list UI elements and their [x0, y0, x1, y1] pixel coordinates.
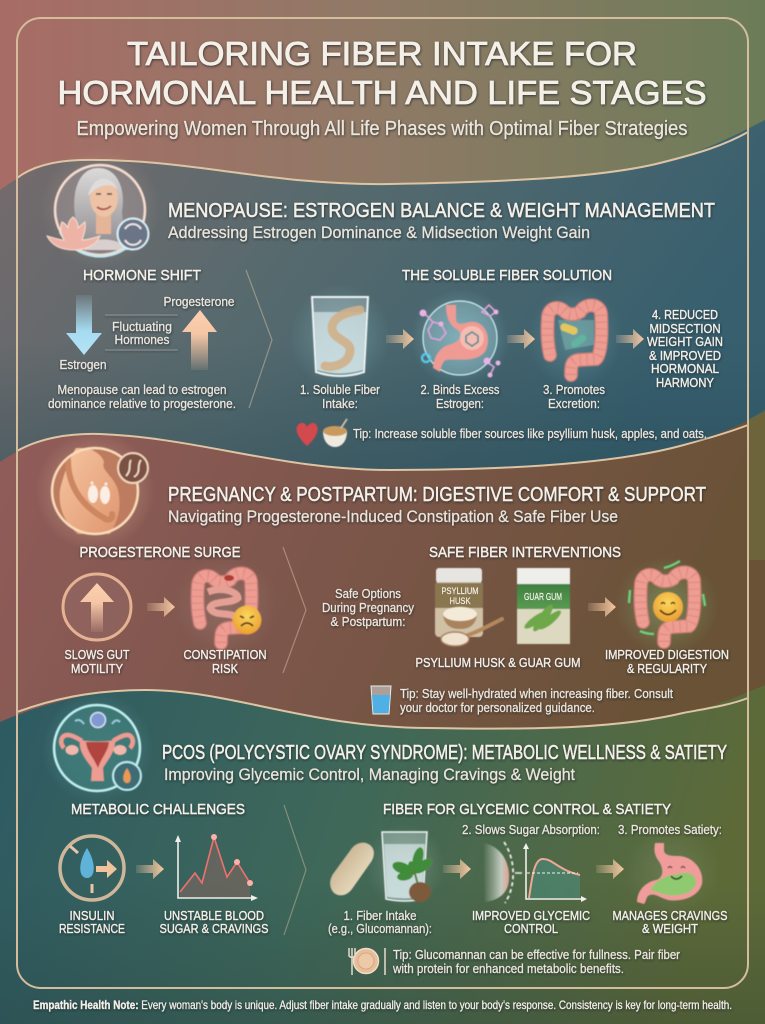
background: section shade — [0, 340, 765, 480]
icon: happy stomach — [624, 826, 720, 918]
label: insulin resistance: INSULIN — [70, 908, 114, 923]
subtitle: Empowering Women Through All Life Phases with Optimal Fiber Strategies — [76, 118, 688, 140]
section accent: right side olive — [748, 410, 765, 560]
tip text: Tip: Stay well-hydrated when increasing fiber. Consult — [400, 686, 673, 701]
arrow: progesterone up — [182, 310, 217, 370]
text: hormone explanation — [48, 382, 236, 411]
icon: constipated intestine — [174, 556, 278, 656]
label: step 3: 3. Promotes — [543, 382, 605, 397]
icon: uterus in circle — [41, 692, 153, 804]
column heading: fiber for glycemic control: FIBER FOR GLYCEMIC CONTROL & SATIETY — [383, 801, 671, 818]
label: unstable blood sugar — [160, 908, 269, 936]
tip text: Tip: Glucomannan can be effective for fullness. Pair fiber — [393, 947, 681, 962]
arrow — [136, 859, 164, 879]
label: unstable blood sugar: SUGAR & CRAVINGS — [160, 921, 269, 936]
icon: psyllium husk jar — [435, 568, 502, 646]
text: step 4: HARMONY — [656, 375, 714, 390]
label: estrogen: Estrogen — [60, 357, 106, 372]
label: step 1 — [300, 382, 381, 411]
label: constipation risk: CONSTIPATION — [184, 647, 266, 662]
chart: unstable blood sugar — [175, 834, 258, 901]
heading: MENOPAUSE: ESTROGEN BALANCE & WEIGHT MANAGEMENT — [168, 200, 715, 222]
label: improved glycemic control: IMPROVED GLYCEMIC — [472, 908, 590, 923]
subheading: Addressing Estrogen Dominance & Midsection Weight Gain — [168, 223, 590, 242]
label: improved glycemic control — [472, 908, 590, 936]
label: progesterone: Progesterone — [164, 294, 234, 309]
column heading: metabolic challenges: METABOLIC CHALLENGES — [71, 801, 245, 818]
icon: capsule — [330, 843, 374, 895]
label: fluctuating hormones: Hormones — [114, 332, 170, 347]
label: step 3 — [543, 382, 605, 411]
chevron divider — [284, 805, 306, 935]
label: insulin resistance — [59, 908, 125, 936]
label: step 3: Excretion: — [548, 396, 600, 411]
icon: water glass — [371, 686, 391, 714]
label: manages cravings: MANAGES CRAVINGS — [612, 908, 728, 923]
text: safe options: & Postpartum: — [330, 614, 406, 629]
icon: guar gum pouch — [517, 568, 570, 644]
tip text — [392, 947, 681, 976]
panel: pregnancy — [35, 431, 729, 715]
labels: step headings: 2. Slows Sugar Absorption: — [462, 822, 600, 837]
tip text — [400, 686, 673, 715]
text: step 4: HORMONAL — [651, 361, 719, 376]
label: step 2: Estrogen: — [436, 396, 484, 411]
text: safe options — [322, 586, 414, 629]
icon: happy colon — [615, 556, 719, 656]
text: step 4: WEIGHT GAIN — [647, 334, 723, 349]
subheading: Improving Glycemic Control, Managing Cravings & Weight — [164, 765, 575, 784]
arrow — [588, 597, 616, 617]
icon: insulin resistance — [60, 836, 124, 900]
labels: step headings: 3. Promotes Satiety: — [618, 822, 722, 837]
icon: heart and bowl — [297, 419, 347, 447]
arrow — [596, 859, 624, 879]
wave dividers — [17, 132, 748, 729]
label: improved digestion — [605, 647, 729, 676]
arrow — [443, 859, 471, 879]
text: hormone explanation: Menopause can lead to estrogen — [58, 382, 226, 397]
icon: psyllium husk jar: HUSK — [450, 596, 470, 606]
chevron divider — [246, 270, 272, 408]
panel: menopause — [40, 148, 723, 447]
column heading: hormone shift: HORMONE SHIFT — [83, 267, 201, 284]
label: fiber intake — [328, 908, 432, 936]
label: slows gut motility — [64, 647, 130, 676]
icon: psyllium husk jar: PSYLLIUM — [442, 586, 478, 596]
icon: gut wall with particles — [483, 842, 522, 903]
background: PCOS section — [0, 685, 765, 1024]
icon: colon with fiber — [527, 286, 623, 390]
panel: PCOS — [41, 692, 728, 976]
icon: guar gum pouch: GUAR GUM — [524, 592, 562, 603]
background: bottom shade — [0, 880, 765, 1024]
label: constipation risk — [184, 647, 266, 676]
text: step 4 — [647, 307, 723, 390]
arrow — [507, 329, 535, 349]
text: safe options: Safe Options — [335, 586, 401, 601]
text: safe options: During Pregnancy — [322, 600, 414, 615]
tip text: with protein for enhanced metabolic benefits. — [392, 961, 624, 976]
background: menopause section — [0, 120, 765, 480]
chart: glycemic curve — [523, 843, 587, 902]
text: hormone explanation: dominance relative to progesterone. — [48, 396, 236, 411]
arrow — [386, 329, 414, 349]
arrow — [616, 329, 644, 349]
tip text: your doctor for personalized guidance. — [400, 700, 595, 715]
label: slows gut motility: SLOWS GUT — [64, 647, 130, 662]
title: HORMONAL HEALTH AND LIFE STAGES — [58, 74, 706, 111]
label: unstable blood sugar: UNSTABLE BLOOD — [164, 908, 264, 923]
column heading: safe fiber interventions: SAFE FIBER INTERVENTIONS — [429, 544, 621, 561]
title — [58, 35, 706, 111]
background: top band — [0, 0, 765, 240]
title: TAILORING FIBER INTAKE FOR — [127, 35, 637, 72]
label: step 1: 1. Soluble Fiber — [300, 382, 381, 397]
background: pregnancy section — [0, 412, 765, 740]
label: step 1: Intake: — [322, 396, 358, 411]
text: step 4: 4. REDUCED — [652, 307, 718, 322]
label: fluctuating hormones: Fluctuating — [112, 319, 172, 334]
label: manages cravings — [612, 908, 728, 936]
label: slows gut motility: MOTILITY — [71, 661, 123, 676]
icon: up arrow in circle — [63, 574, 131, 640]
icon: glass and plant — [365, 824, 445, 908]
arrow — [147, 597, 175, 617]
label: fluctuating hormones — [105, 315, 178, 350]
label: constipation risk: RISK — [212, 661, 238, 676]
label: psyllium husk and guar gum: PSYLLIUM HUSK & GUAR GUM — [416, 655, 580, 670]
label: fiber intake: 1. Fiber Intake — [344, 908, 416, 923]
icon: pregnant belly — [35, 431, 155, 551]
column heading: soluble fiber solution: THE SOLUBLE FIBER SOLUTION — [402, 267, 612, 284]
text: step 4: & IMPROVED — [649, 348, 721, 363]
tip text: Tip: Increase soluble fiber sources like psyllium husk, apples, and oats. — [353, 426, 707, 441]
label: improved digestion: IMPROVED DIGESTION — [605, 647, 729, 662]
label: improved digestion: & REGULARITY — [627, 661, 707, 676]
label: insulin resistance: RESISTANCE — [59, 921, 125, 936]
icon: stomach in bubble — [410, 288, 510, 388]
label: manages cravings: & WEIGHT — [642, 921, 698, 936]
chevron divider — [283, 547, 306, 673]
labels: step headings — [462, 822, 722, 837]
icon: woman portrait with lotus — [40, 148, 160, 268]
label: improved glycemic control: CONTROL — [504, 921, 558, 936]
icon: plate with cutlery — [349, 948, 385, 975]
column heading: progesterone surge: PROGESTERONE SURGE — [80, 544, 240, 561]
label: step 2: 2. Binds Excess — [420, 382, 500, 397]
label: step 2 — [420, 382, 500, 411]
label: fiber intake: (e.g., Glucomannan): — [328, 921, 432, 936]
icon: glass with fiber — [290, 283, 390, 391]
text: step 4: MIDSECTION — [650, 321, 720, 336]
arrow: estrogen down — [66, 295, 102, 355]
subheading: Navigating Progesterone-Induced Constipation & Safe Fiber Use — [168, 507, 618, 526]
